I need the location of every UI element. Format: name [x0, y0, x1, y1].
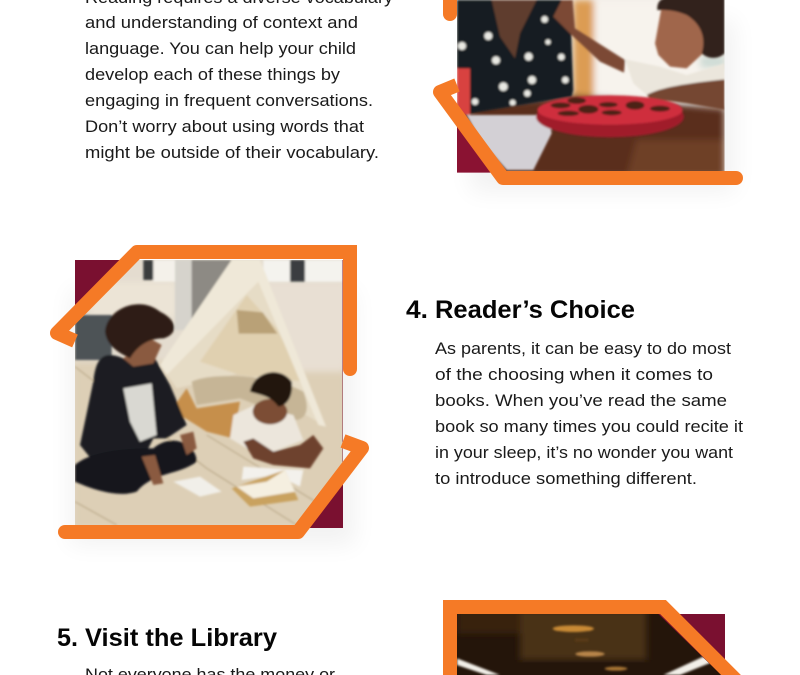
- text block: tip 3 body: develop each of these things by: [85, 65, 341, 84]
- text block: tip 4 body: books. When you’ve read the same: [435, 391, 727, 410]
- heading: tip 5: Visit the Library: [85, 624, 277, 652]
- photo: parent feeding child: [457, 0, 725, 177]
- orange frame: top and sides: [450, 607, 750, 675]
- crimson backing: [75, 260, 343, 528]
- text block: tip 3 body: language. You can help your child: [85, 39, 356, 58]
- text block: tip 3 body: Don’t worry about using words that: [85, 117, 364, 136]
- crimson corner: [457, 614, 725, 675]
- heading: tip 4: 4.: [406, 296, 428, 324]
- heading: tip 4: Reader’s Choice: [435, 296, 635, 324]
- text block: tip 4 body: to introduce something different.: [435, 469, 697, 488]
- text block: tip 3 body: and understanding of context and: [85, 13, 358, 32]
- text block: tip 3 body: might be outside of their vocabulary.: [85, 143, 379, 162]
- orange frame: lower bracket: [58, 441, 362, 539]
- crimson corner: [457, 100, 510, 173]
- text block: tip 4 body: [435, 339, 743, 488]
- text block: tip 3 body: engaging in frequent conversations.: [85, 91, 373, 110]
- photo frame: children reading by a tent: [57, 245, 362, 545]
- photo: reading on the floor: [73, 260, 347, 528]
- text block: tip 3 body: [85, 0, 394, 162]
- text block: tip 4 body: book so many times you could recite it: [435, 417, 743, 436]
- text block: tip 4 body: As parents, it can be easy to do most: [435, 339, 731, 358]
- photo frame: library interior: [450, 607, 750, 675]
- photo frame: parent and child at table: [440, 0, 743, 192]
- photo: library ceiling: [457, 614, 721, 675]
- text block: tip 4 body: in your sleep, it’s no wonder you want: [435, 443, 733, 462]
- orange frame: top stub: [443, 0, 457, 14]
- text block: tip 4 body: of the choosing when it comes to: [435, 365, 713, 384]
- heading: tip 5: 5.: [57, 624, 78, 652]
- orange frame: upper bracket: [57, 245, 357, 369]
- orange frame: lower bracket: [440, 85, 743, 185]
